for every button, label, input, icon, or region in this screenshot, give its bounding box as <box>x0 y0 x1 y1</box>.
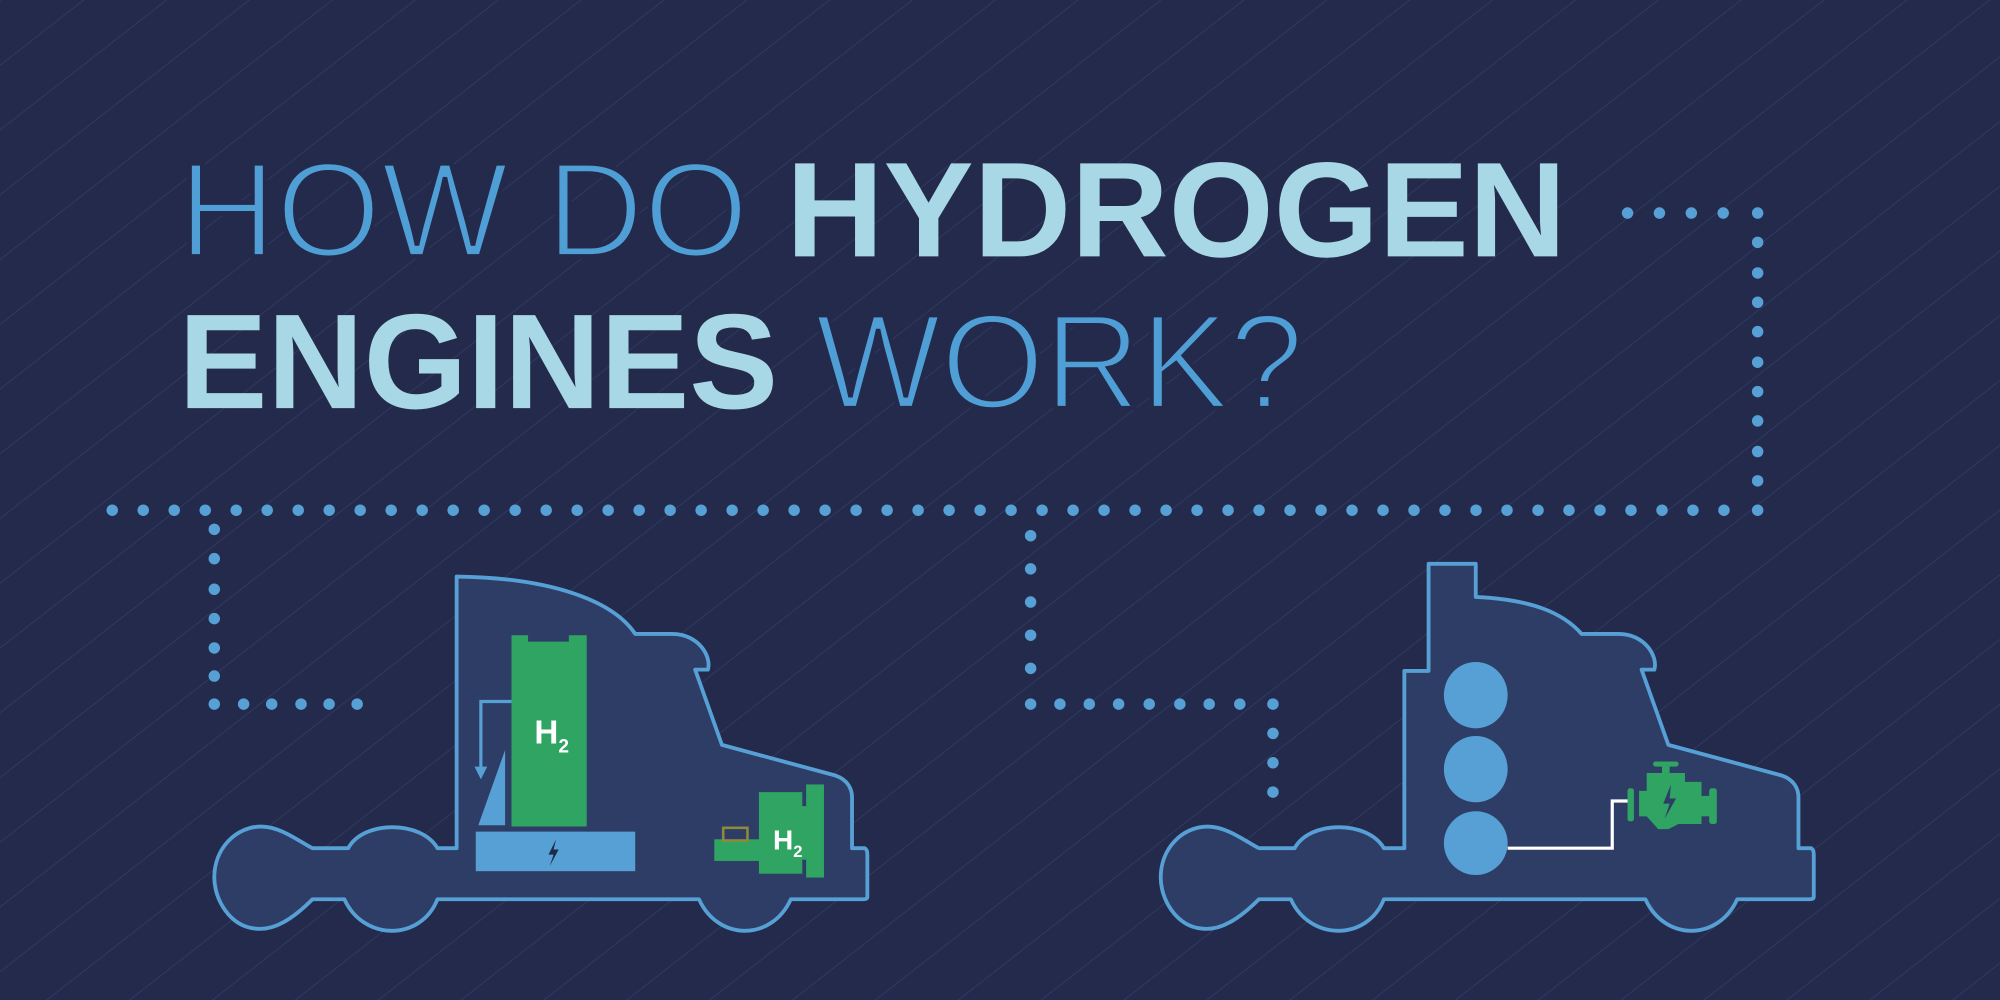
electric motor: H <box>773 824 793 855</box>
electric motor <box>714 784 824 878</box>
hydrogen tank: 2 <box>558 737 569 758</box>
hydrogen tank <box>511 635 587 827</box>
title: HOW DO HYDROGEN <box>179 134 1566 285</box>
battery <box>476 832 635 871</box>
hydrogen tank: H <box>534 715 558 752</box>
fuel line <box>1508 801 1633 848</box>
title <box>179 134 1566 437</box>
fuel cell triangle <box>478 750 505 825</box>
icon: engine <box>1628 761 1717 829</box>
hydrogen tanks <box>1444 662 1508 875</box>
truck 2: hydrogen combustion engine <box>1161 564 1814 931</box>
truck 1: hydrogen fuel cell <box>214 577 867 931</box>
electric motor: 2 <box>793 842 802 861</box>
dotted connector lines <box>107 207 1763 798</box>
arrow <box>481 702 511 768</box>
title: ENGINES WORK? <box>179 286 1304 437</box>
